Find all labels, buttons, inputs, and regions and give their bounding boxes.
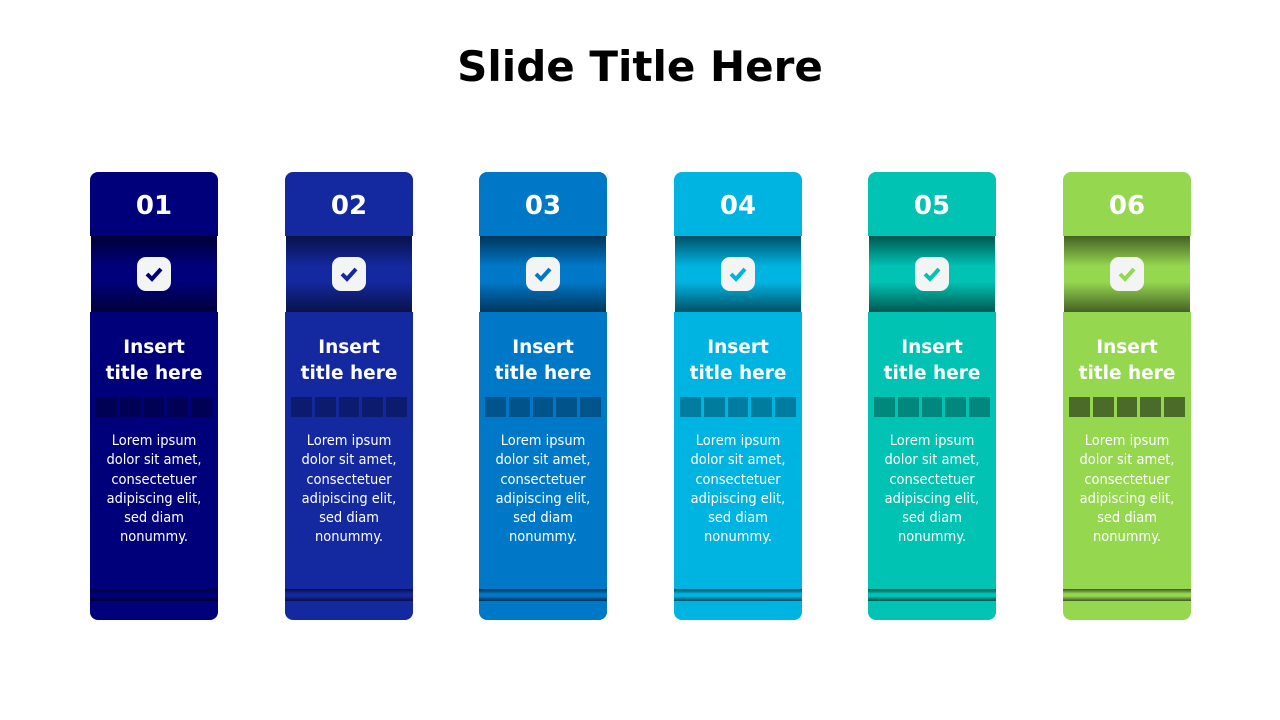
panel: 02: 02 [331, 191, 367, 221]
panel: 06: title here [1079, 363, 1175, 384]
panel: 02: title here [301, 363, 397, 384]
panel: 05: 05 [914, 191, 950, 221]
panel: 06 [1063, 172, 1191, 620]
panel: 03: Insert [512, 337, 574, 358]
panel: 04: 04 [720, 191, 756, 221]
panel: 04 [674, 172, 802, 620]
panel: 01: title here [106, 363, 202, 384]
panel: 03 [479, 172, 607, 620]
panel: 01 [90, 172, 218, 620]
panel: 02: Lorem ipsum dolor sit amet, consectetuer adipiscing elit, sed diam nonummy. [301, 433, 397, 545]
panel: 03: Lorem ipsum dolor sit amet, consectetuer adipiscing elit, sed diam nonummy. [495, 433, 591, 545]
panel: 05: title here [884, 363, 980, 384]
panel: 06: Lorem ipsum dolor sit amet, consectetuer adipiscing elit, sed diam nonummy. [1079, 433, 1175, 545]
panel: 04: Lorem ipsum dolor sit amet, consectetuer adipiscing elit, sed diam nonummy. [690, 433, 786, 545]
panel: 02 [285, 172, 413, 620]
panel: 05: Lorem ipsum dolor sit amet, consectetuer adipiscing elit, sed diam nonummy. [884, 433, 980, 545]
panel: 06: Insert [1096, 337, 1158, 358]
title: Slide Title Here [457, 42, 823, 91]
panel: 03: 03 [525, 191, 561, 221]
panel: 01: Insert [123, 337, 185, 358]
panel: 05: Insert [901, 337, 963, 358]
panel: 06: 06 [1109, 191, 1145, 221]
panel: 02: Insert [318, 337, 380, 358]
panel: 01: 01 [136, 191, 172, 221]
panel: 01: Lorem ipsum dolor sit amet, consectetuer adipiscing elit, sed diam nonummy. [106, 433, 202, 545]
panel: 05 [868, 172, 996, 620]
panel: 04: title here [690, 363, 786, 384]
panel: 03: title here [495, 363, 591, 384]
panel: 04: Insert [707, 337, 769, 358]
